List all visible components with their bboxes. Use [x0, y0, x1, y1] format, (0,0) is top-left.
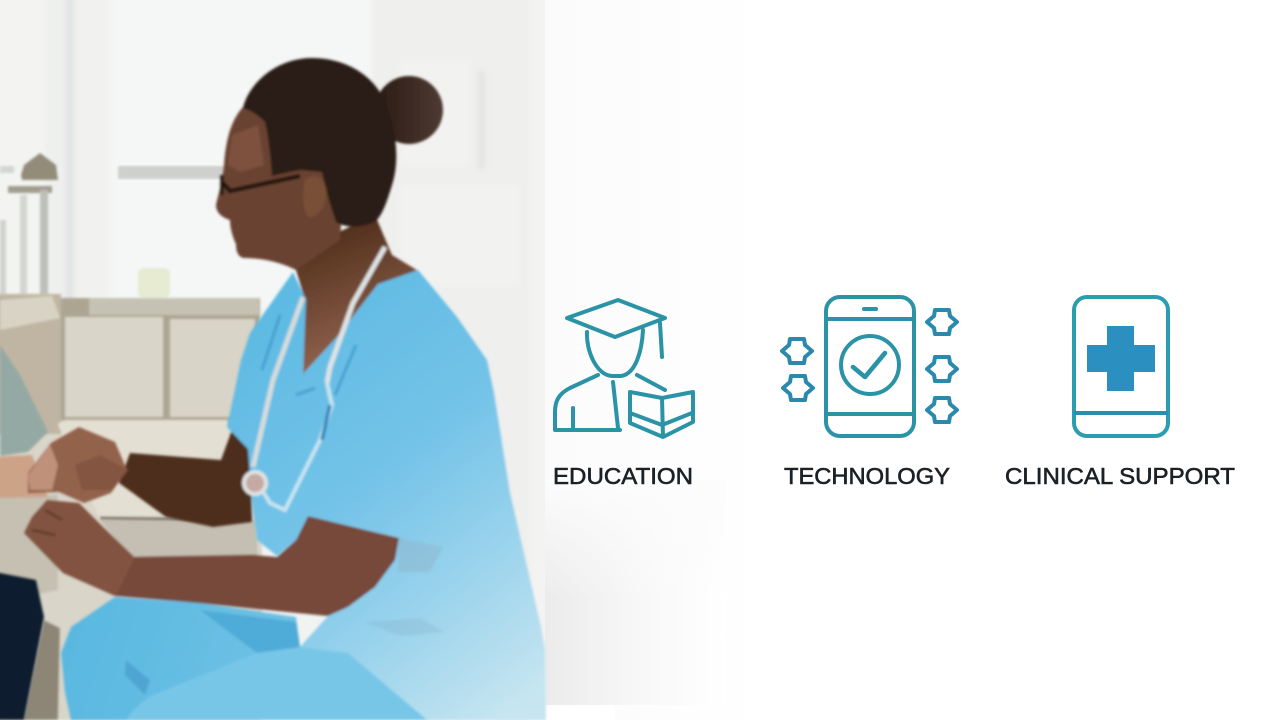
nurse	[24, 58, 546, 720]
pants	[61, 597, 427, 720]
sleeve shade	[398, 538, 443, 572]
phone body	[826, 297, 914, 436]
patient	[0, 345, 48, 720]
medical cross	[1087, 326, 1155, 391]
fold shadows	[262, 315, 356, 395]
check badge	[841, 336, 899, 394]
body	[555, 375, 665, 430]
sofa and cabinet	[0, 294, 262, 720]
open book	[630, 392, 693, 437]
top hands	[28, 427, 127, 503]
label: technology: TECHNOLOGY	[784, 463, 950, 489]
icon: graduate with book	[555, 300, 693, 437]
icon: medical device with cross	[1074, 297, 1168, 436]
head	[587, 330, 643, 376]
label: clinical support: CLINICAL SUPPORT	[1005, 463, 1235, 489]
lamp	[0, 153, 58, 295]
scrub top	[227, 270, 546, 720]
front hand	[24, 500, 134, 596]
hair	[243, 58, 396, 226]
hair bun	[375, 76, 443, 144]
front arm	[115, 516, 399, 616]
device outline	[1074, 297, 1168, 436]
plant pot	[138, 268, 170, 298]
window rail	[118, 166, 228, 179]
icon: smartphone with check mark	[782, 297, 957, 436]
right fade	[545, 0, 785, 720]
panel: photo of nurse with patient	[0, 0, 785, 720]
mortarboard cap	[567, 300, 665, 357]
neck and chest	[296, 215, 420, 374]
ear	[303, 176, 326, 218]
back arm	[119, 430, 252, 527]
stethoscope	[244, 247, 385, 510]
glasses	[223, 176, 300, 191]
label: education: EDUCATION	[553, 463, 693, 489]
face	[216, 107, 345, 270]
connector nodes	[782, 310, 957, 422]
room background	[0, 0, 550, 720]
